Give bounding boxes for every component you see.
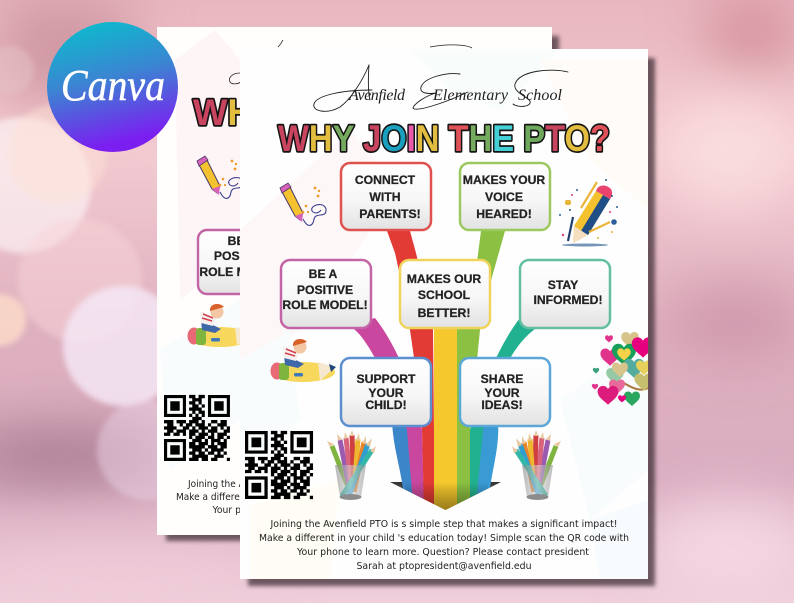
icon: large pencil with splatter (559, 179, 618, 246)
main title: WHY JOIN THE PTO? (278, 118, 610, 159)
footer paragraph (259, 519, 629, 572)
box: makes our school better: MAKES OUR (407, 272, 481, 286)
box: support your child (341, 358, 431, 426)
box: stay informed: STAY (548, 278, 578, 292)
back flyer footer text: Joining the Avenfield PTO is a simple step that makes a significant impact! (187, 479, 522, 490)
box: support your child: CHILD! (365, 398, 407, 412)
box: makes your voice heard: MAKES YOUR (463, 173, 545, 187)
icon: right pencil cup (512, 430, 561, 500)
icon: small pencil with squiggle (280, 183, 326, 225)
box: share your ideas: SHARE (481, 372, 523, 386)
main flyer shadow (248, 58, 655, 586)
box: be a positive role model: ROLE MODEL! (282, 298, 368, 312)
rainbow ribbon arrow (350, 231, 545, 512)
box: connect with parents (341, 163, 431, 230)
back flyer footer text: Make a different in your child 's education today! Simple scan the QR code with (176, 492, 534, 503)
school name script heading (314, 65, 568, 111)
arrow head (390, 482, 501, 510)
box: be a positive role model: POSITIVE (297, 283, 353, 297)
box: connect with parents: WITH (369, 190, 401, 204)
back flyer role model box (198, 230, 288, 294)
school name script heading: School (518, 87, 563, 104)
footer paragraph: Joining the Avenfield PTO is s simple step that makes a significant impact! (270, 519, 618, 530)
back flyer role model box: POSITIVE (214, 249, 270, 263)
main flyer sheet (240, 49, 648, 579)
box: makes our school better: BETTER! (418, 306, 470, 320)
QR code (245, 431, 313, 499)
back flyer role model box: BE A (228, 234, 257, 248)
box: stay informed (520, 260, 610, 328)
back flyer footer text (176, 479, 534, 516)
box: be a positive role model: BE A (309, 267, 338, 281)
Canva logo badge (47, 22, 178, 152)
icon: heart tree (592, 332, 654, 406)
back flyer footer text: Your phone to learn more. Question? Please contact president (212, 505, 498, 516)
school name script heading: Elementary (432, 87, 509, 104)
box: share your ideas (460, 358, 550, 426)
box: stay informed: INFORMED! (533, 293, 603, 307)
box: makes your voice heard (460, 163, 550, 230)
back flyer school name (229, 40, 472, 84)
icon: left pencil cup (327, 430, 376, 500)
school name script heading: Avenfield (348, 87, 406, 104)
footer paragraph: Sarah at ptopresident@avenfield.edu (356, 561, 532, 572)
box: be a positive role model (281, 260, 371, 328)
box: makes your voice heard: VOICE (485, 190, 523, 204)
footer paragraph: Make a different in your child 's education today! Simple scan the QR code with (259, 533, 629, 544)
icon: boy riding pencil (270, 339, 336, 382)
box: support your child: YOUR (368, 386, 404, 400)
box: makes your voice heard: HEARED! (476, 207, 532, 221)
back flyer pencil icon (197, 156, 243, 198)
box: connect with parents: CONNECT (355, 173, 416, 187)
Canva logo badge: Canva (61, 61, 165, 110)
back flyer QR code (164, 395, 230, 461)
back flyer boy on pencil (188, 304, 253, 347)
box: support your child: SUPPORT (357, 372, 416, 386)
footer paragraph: Your phone to learn more. Question? Please contact president (296, 547, 589, 558)
box: share your ideas: IDEAS! (481, 398, 523, 412)
back flyer title: WHY (193, 92, 278, 133)
box: makes our school better (400, 260, 490, 328)
box: share your ideas: YOUR (484, 386, 520, 400)
back flyer sheet (157, 27, 552, 535)
box: connect with parents: PARENTS! (359, 207, 421, 221)
box: makes our school better: SCHOOL (418, 288, 471, 302)
back flyer role model box: ROLE MODEL! (199, 265, 285, 279)
back flyer shadow (166, 36, 559, 541)
